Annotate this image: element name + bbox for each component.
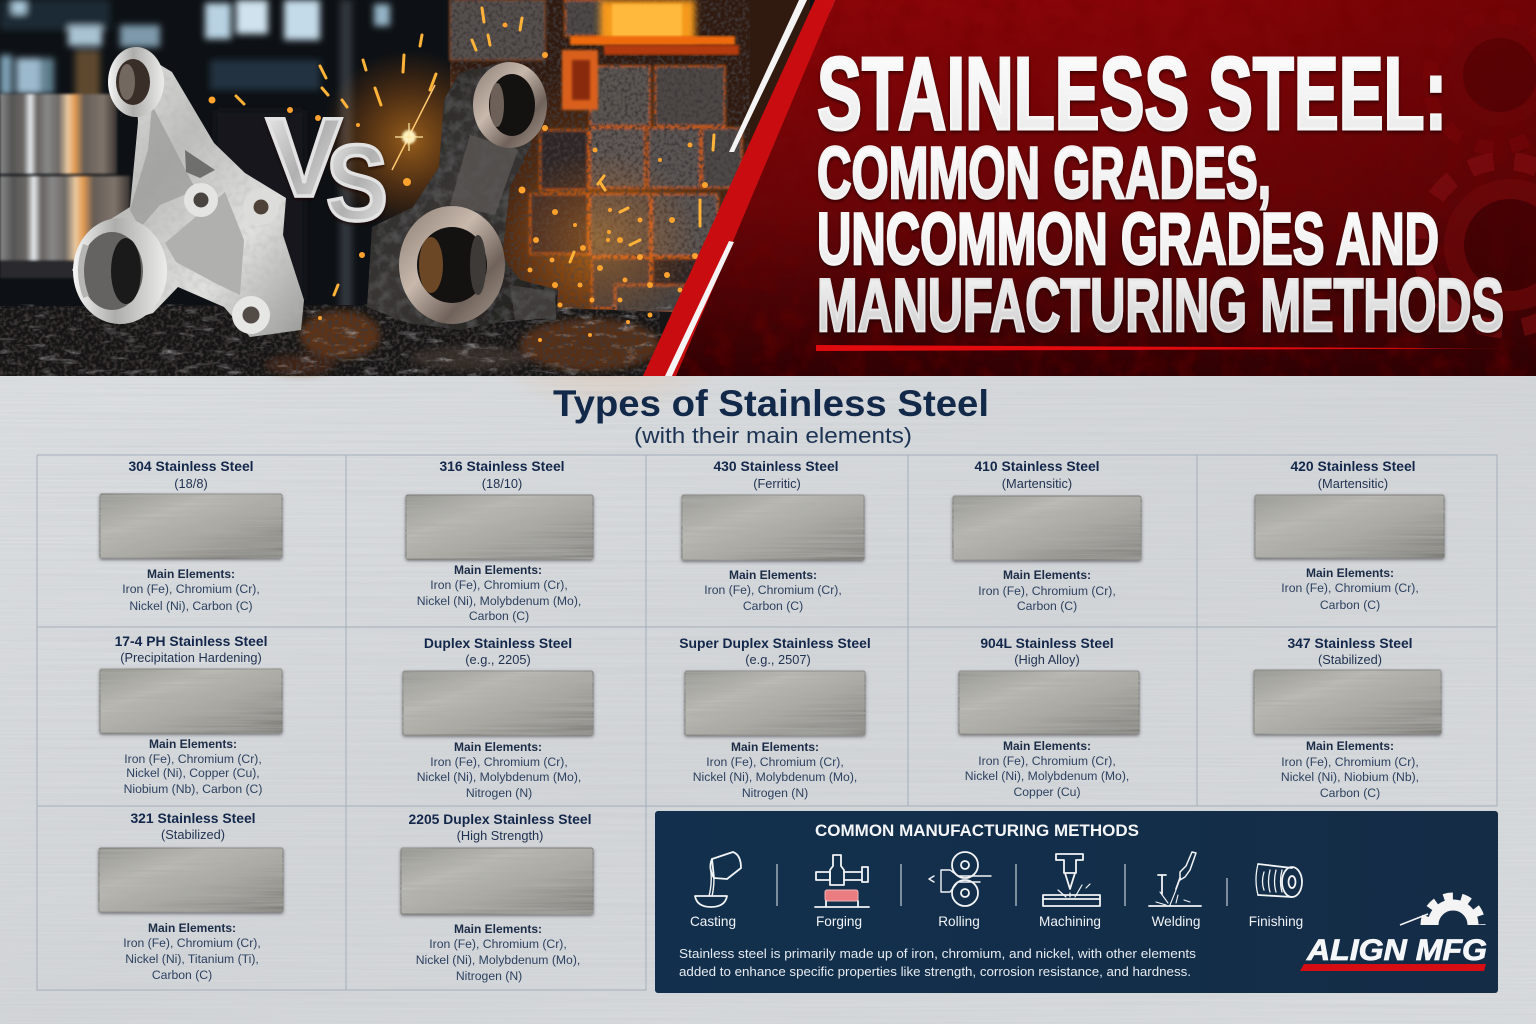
card: 347: Nickel (Ni), Niobium (Nb),: [1281, 770, 1419, 784]
card: 2205 Duplex: Iron (Fe), Chromium (Cr),: [429, 937, 567, 951]
panel: common manufacturing methods: [655, 811, 1498, 993]
method labels: [690, 914, 1303, 929]
silver connecting part: [72, 47, 304, 337]
plate: 321: [99, 848, 283, 912]
method labels: Rolling: [938, 914, 980, 929]
VS lettering: S: [326, 122, 388, 243]
method labels: Forging: [816, 914, 862, 929]
card: 410: Main Elements:: [1003, 568, 1091, 582]
description text: Stainless steel is primarily made up of iron, chromium, and nickel, with other elements: [679, 946, 1196, 961]
card: 321: Main Elements:: [148, 921, 236, 935]
section heading: (with their main elements): [634, 423, 912, 448]
card: Duplex: (e.g., 2205): [465, 652, 531, 667]
icon: finishing: [1256, 864, 1302, 897]
card: Super Duplex: [679, 635, 871, 800]
plate: 904L: [959, 671, 1139, 734]
card: 904L: [959, 635, 1139, 799]
red accent strip: [643, 0, 835, 376]
dark connecting part: [367, 62, 558, 330]
plate: 17-4 PH: [100, 669, 282, 733]
bolt rings: [184, 183, 218, 217]
grades table grid: [37, 455, 1497, 990]
white accent stripes: [729, 0, 807, 152]
card: 410: 410 Stainless Steel: [974, 458, 1100, 474]
card: 430: Carbon (C): [743, 599, 803, 613]
card: 410: [953, 458, 1141, 613]
card: 410: Iron (Fe), Chromium (Cr),: [978, 584, 1116, 598]
top ring: [473, 62, 547, 148]
card: 410: Carbon (C): [1017, 599, 1077, 613]
card: 347: Iron (Fe), Chromium (Cr),: [1281, 755, 1419, 769]
card: 304: Main Elements:: [147, 567, 235, 581]
card: 321: (Stabilized): [161, 827, 225, 842]
card: 430: Iron (Fe), Chromium (Cr),: [704, 583, 842, 597]
card: 304: Iron (Fe), Chromium (Cr),: [122, 582, 260, 596]
card: 904L: Nickel (Ni), Molybdenum (Mo),: [965, 769, 1129, 783]
card: Duplex: Main Elements:: [454, 740, 542, 754]
card: 316: Nickel (Ni), Molybdenum (Mo),: [417, 594, 581, 608]
method labels: Casting: [690, 914, 736, 929]
card: 904L: (High Alloy): [1014, 652, 1080, 667]
logo gear: [1400, 897, 1481, 925]
card: 2205 Duplex: Nickel (Ni), Molybdenum (Mo),: [416, 953, 580, 967]
spark glow: [320, 50, 500, 230]
card: 347: (Stabilized): [1318, 652, 1382, 667]
card: Super Duplex: Nitrogen (N): [742, 786, 808, 800]
card: 321: Carbon (C): [152, 968, 212, 982]
icon: rolling: [929, 852, 991, 906]
card: Duplex: Nickel (Ni), Molybdenum (Mo),: [417, 770, 581, 784]
plate: 347: [1254, 670, 1441, 734]
card: Super Duplex: Super Duplex Stainless Steel: [679, 635, 871, 651]
card: 410: (Martensitic): [1002, 476, 1072, 491]
card: 347: Carbon (C): [1320, 786, 1380, 800]
section heading: [553, 383, 989, 448]
card: 904L: Copper (Cu): [1013, 785, 1081, 799]
plate: 2205 Duplex: [401, 848, 593, 914]
main title: COMMON GRADES,: [817, 133, 1271, 214]
card: 316: Carbon (C): [469, 609, 529, 623]
icon: forging: [815, 855, 869, 907]
card: 17-4 PH: Main Elements:: [149, 737, 237, 751]
plate: 304: [100, 494, 282, 558]
logo: Align MFG: [1300, 897, 1487, 971]
card: 17-4 PH: Niobium (Nb), Carbon (C): [124, 782, 262, 796]
hero photo: factory background, parts and sparks: [0, 0, 830, 420]
VS lettering: V: [266, 95, 342, 220]
card: 347: 347 Stainless Steel: [1287, 635, 1413, 651]
card: 2205 Duplex: Main Elements:: [454, 922, 542, 936]
card: 904L: Main Elements:: [1003, 739, 1091, 753]
plate: 430: [682, 495, 864, 560]
card: 321: 321 Stainless Steel: [130, 810, 256, 826]
plate: Duplex: [403, 671, 593, 735]
faint gears: [1421, 16, 1536, 329]
logo: Align MFG: ALIGN MFG: [1306, 934, 1487, 967]
card: 2205 Duplex: (High Strength): [457, 828, 543, 843]
card: 430: [682, 458, 864, 613]
card: 321: Nickel (Ni), Titanium (Ti),: [125, 952, 259, 966]
top ring: [108, 47, 164, 117]
stacked steel cylinders: [0, 94, 130, 278]
wet table: [0, 305, 672, 376]
card: 316: Main Elements:: [454, 563, 542, 577]
card: 17-4 PH: 17-4 PH Stainless Steel: [115, 633, 267, 649]
card: 316: 316 Stainless Steel: [439, 458, 565, 474]
card: 2205 Duplex: Nitrogen (N): [456, 969, 522, 983]
block tower with furnace glow: [440, 0, 810, 420]
plate: 316: [406, 495, 593, 559]
card: 347: [1254, 635, 1441, 800]
description text: [679, 946, 1196, 979]
dividers: [777, 864, 1227, 906]
card: 420: 420 Stainless Steel: [1290, 458, 1416, 474]
plate: 420: [1255, 495, 1444, 558]
card: 420: Carbon (C): [1320, 598, 1380, 612]
method labels: Welding: [1152, 914, 1200, 929]
card: 904L: 904L Stainless Steel: [980, 635, 1114, 651]
plate: 410: [953, 496, 1141, 560]
card: 304: Nickel (Ni), Carbon (C): [129, 599, 253, 613]
card: Super Duplex: (e.g., 2507): [745, 652, 811, 667]
card: 316: Iron (Fe), Chromium (Cr),: [430, 578, 568, 592]
icon: welding: [1149, 852, 1201, 906]
card: Duplex: Iron (Fe), Chromium (Cr),: [430, 755, 568, 769]
card: 430: 430 Stainless Steel: [713, 458, 839, 474]
furnace opening: [600, 0, 695, 42]
card: Duplex: Duplex Stainless Steel: [424, 635, 572, 651]
card: 321: [99, 810, 283, 982]
card: 420: Main Elements:: [1306, 566, 1394, 580]
card: 321: Iron (Fe), Chromium (Cr),: [123, 936, 261, 950]
card: 420: (Martensitic): [1318, 476, 1388, 491]
panel heading: COMMON MANUFACTURING METHODS: [815, 822, 1139, 840]
method labels: Machining: [1039, 914, 1101, 929]
card: 17-4 PH: (Precipitation Hardening): [120, 650, 262, 665]
card: 420: [1255, 458, 1444, 612]
section heading: Types of Stainless Steel: [553, 383, 989, 424]
page background: brushed steel: [0, 376, 1536, 1024]
plate: Super Duplex: [685, 671, 865, 735]
bright star spark: [392, 85, 435, 170]
card: 420: Iron (Fe), Chromium (Cr),: [1281, 581, 1419, 595]
card: 2205 Duplex: [401, 811, 593, 983]
card: Super Duplex: Nickel (Ni), Molybdenum (Mo),: [693, 770, 857, 784]
card: 304: [100, 458, 282, 613]
card: 430: (Ferritic): [753, 476, 801, 491]
card: 17-4 PH: Iron (Fe), Chromium (Cr),: [124, 752, 262, 766]
big ring: [399, 206, 505, 324]
card: 17-4 PH: Nickel (Ni), Copper (Cu),: [126, 766, 260, 780]
card: Duplex: [403, 635, 593, 800]
card: 304: 304 Stainless Steel: [128, 458, 254, 474]
card: Super Duplex: Iron (Fe), Chromium (Cr),: [706, 755, 844, 769]
factory windows, blurred: [0, 0, 390, 370]
card: Duplex: Nitrogen (N): [466, 786, 532, 800]
card: Super Duplex: Main Elements:: [731, 740, 819, 754]
description text: added to enhance specific properties like strength, corrosion resistance, and hardness.: [679, 964, 1191, 979]
card: 316: [406, 458, 593, 623]
main title: [817, 36, 1504, 347]
VS lettering: [266, 95, 388, 243]
icon: casting: [695, 852, 741, 907]
title underline: [816, 345, 1512, 351]
card: 430: Main Elements:: [729, 568, 817, 582]
method labels: Finishing: [1249, 914, 1303, 929]
card: 904L: Iron (Fe), Chromium (Cr),: [978, 754, 1116, 768]
red title panel: [643, 0, 1536, 376]
card: 304: (18/8): [174, 476, 208, 491]
sparks: [236, 8, 714, 295]
big ring: [73, 218, 167, 324]
card: 17-4 PH: [100, 633, 282, 796]
card: 2205 Duplex: 2205 Duplex Stainless Steel: [408, 811, 592, 827]
icon: machining: [1043, 854, 1100, 906]
card: 316: (18/10): [482, 476, 522, 491]
card: 347: Main Elements:: [1306, 739, 1394, 753]
